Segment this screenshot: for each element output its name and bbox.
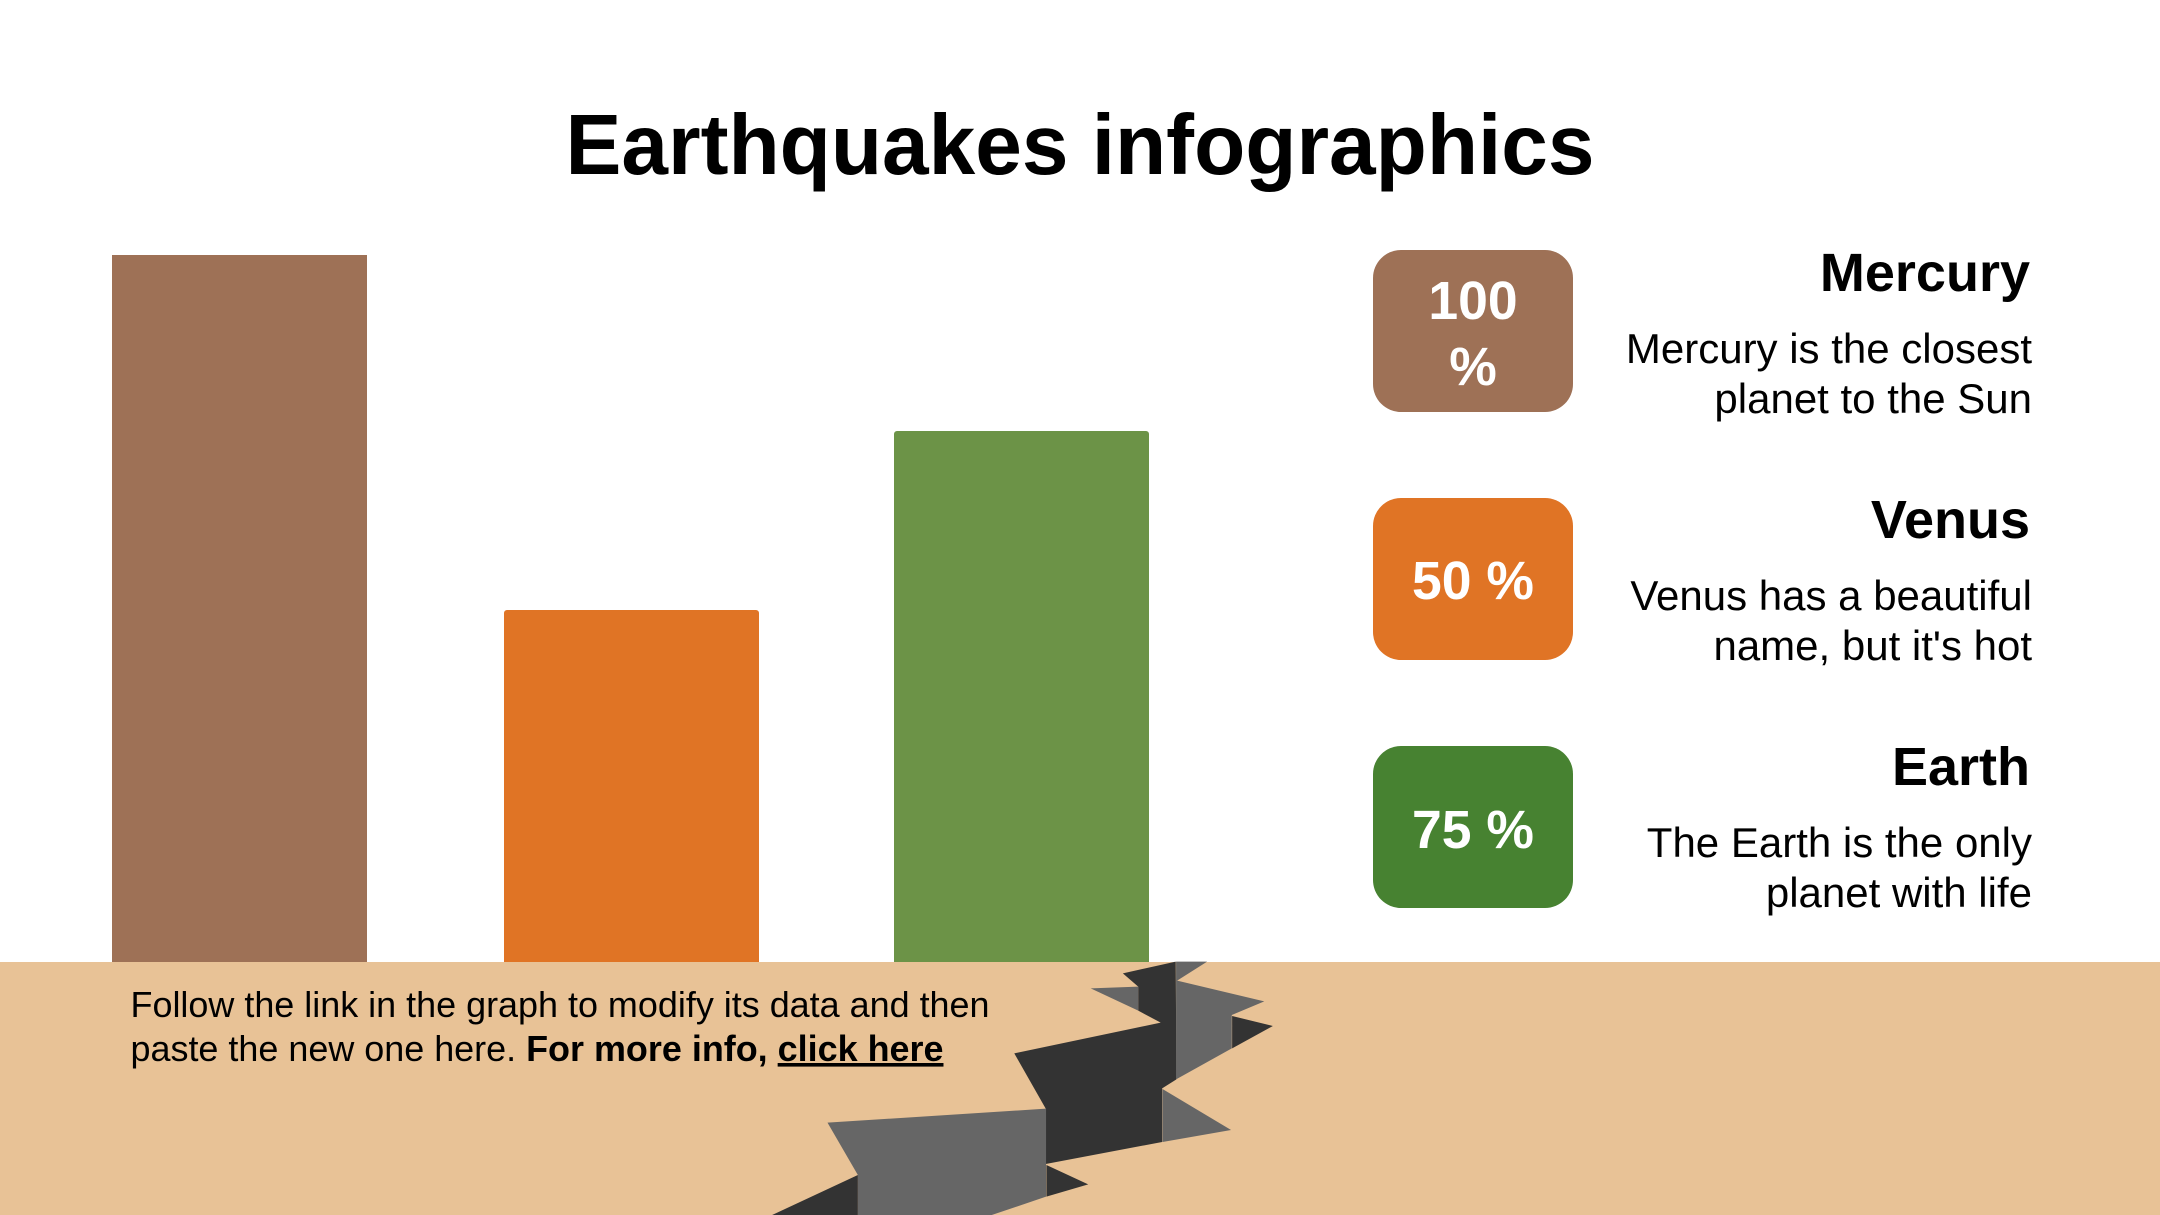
icon: ground crack: [772, 962, 1273, 1215]
badge: 100 %: [1373, 250, 1573, 412]
text: Venus description: name, but it's hot: [1713, 622, 2032, 669]
heading: Earth: Earth: [1892, 737, 2030, 797]
badge: 75 %: 75 %: [1412, 801, 1534, 860]
panel: Venus: [1373, 490, 2032, 669]
text: Mercury description: Mercury is the closest: [1626, 325, 2032, 372]
crack upper left face: [1091, 987, 1138, 1011]
crack middle right face: [1162, 1089, 1231, 1142]
crack upper right face: [1176, 962, 1264, 1079]
crack right shadow: [1232, 1016, 1273, 1048]
panel: Earth: [1373, 737, 2032, 916]
text block: footer note: paste the new one here. For more info, click here: [130, 1028, 943, 1069]
text: Earth description: The Earth is the only: [1647, 819, 2032, 866]
heading: Venus: Venus: [1871, 490, 2030, 550]
crack lower face: [827, 1109, 1046, 1215]
badge: 100 %: 100: [1428, 272, 1518, 331]
text: Earth description: [1647, 819, 2032, 916]
bar: Venus: [504, 610, 759, 965]
crack lower right shadow: [1046, 1165, 1088, 1197]
text block: footer note: Follow the link in the graph to modify its data and then: [130, 984, 990, 1025]
bar: Earth: [894, 431, 1149, 965]
ground: [0, 962, 2160, 1215]
panel: Mercury: [1373, 243, 2032, 422]
badge: 50 %: 50 %: [1412, 552, 1534, 611]
heading: Mercury: Mercury: [1820, 243, 2030, 303]
crack dark centre: [1014, 962, 1176, 1164]
text block: footer note: [130, 984, 990, 1069]
badge: 100 %: %: [1449, 338, 1497, 397]
title: Earthquakes infographics: [566, 98, 1594, 193]
badge: 75 %: [1373, 746, 1573, 908]
text: Earth description: planet with life: [1766, 869, 2032, 916]
badge: 50 %: [1373, 498, 1573, 660]
bar chart: [112, 255, 1149, 965]
text: Mercury description: [1626, 325, 2032, 422]
text: Venus description: Venus has a beautiful: [1630, 572, 2032, 619]
text: Venus description: [1630, 572, 2032, 669]
bar: Mercury: [112, 255, 367, 965]
crack lower left shadow: [772, 1175, 858, 1215]
text: Mercury description: planet to the Sun: [1714, 375, 2032, 422]
